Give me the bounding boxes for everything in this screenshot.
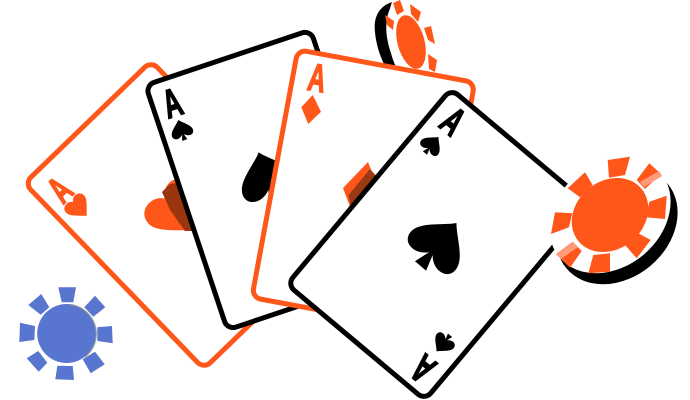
icon: large spade [232, 144, 302, 212]
icon: top small spade [417, 130, 447, 160]
text: A on spades card: A [157, 80, 188, 128]
icon: small heart [62, 191, 96, 225]
text: A on hearts card: A [38, 168, 81, 211]
chip: blue chip [19, 287, 113, 380]
icon: small diamond [301, 95, 321, 124]
card: ace of diamonds [252, 50, 475, 330]
icon: bottom small spade [428, 328, 458, 358]
icon: small spade [168, 117, 195, 143]
icon: large diamond [343, 162, 376, 212]
card: ace of spades, tilted left [146, 30, 392, 330]
text: A on diamonds card: A [305, 55, 330, 101]
chip: large orange chip [526, 133, 690, 308]
chip: orange chip behind cards [375, 0, 444, 87]
text: bottom A on front card: A [402, 345, 445, 391]
highlight stripes [640, 171, 662, 187]
card: ace of hearts [25, 61, 330, 369]
card shadow on heart [162, 183, 194, 231]
card shadow on diamond [348, 169, 378, 212]
icon: center spade [398, 204, 479, 285]
card: ace of spades, front [287, 89, 589, 400]
text: top A on front card: A [431, 99, 474, 145]
icon: large heart [139, 173, 217, 251]
